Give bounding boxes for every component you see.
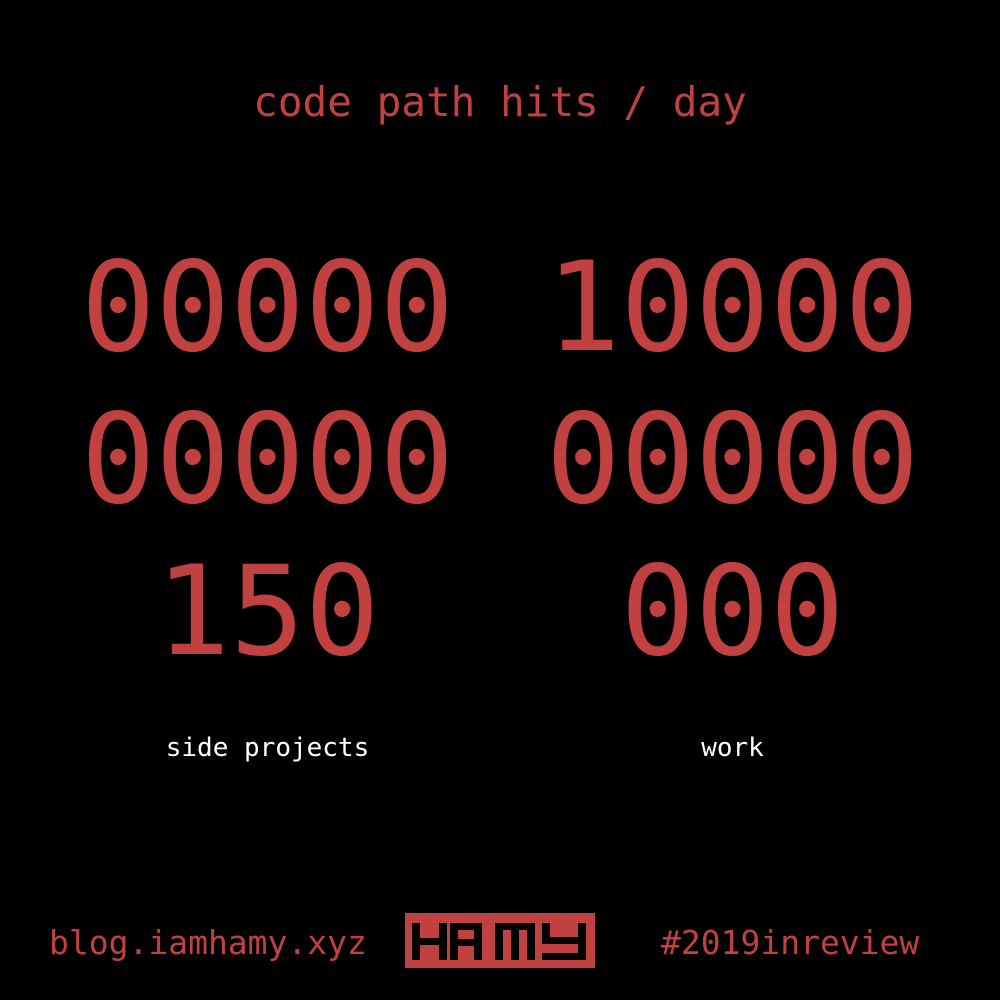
- panel: work number: 000: [621, 540, 844, 684]
- panel: side projects number: 00000: [81, 388, 454, 532]
- panel: side projects number: 00000: [81, 236, 454, 380]
- footer: hashtag: #2019inreview: [661, 923, 919, 962]
- panel: work number: 10000: [546, 236, 919, 380]
- panel: side projects number: 150: [156, 540, 379, 684]
- logo: HAMY: [405, 913, 595, 968]
- panel: work number: 00000: [546, 388, 919, 532]
- panel: work number: [546, 236, 919, 684]
- footer: blog url: blog.iamhamy.xyz: [49, 923, 367, 962]
- panel: side projects number: [81, 236, 454, 684]
- label: side projects: side projects: [166, 733, 369, 763]
- label: work: work: [701, 733, 764, 763]
- title: code path hits / day: [253, 78, 747, 126]
